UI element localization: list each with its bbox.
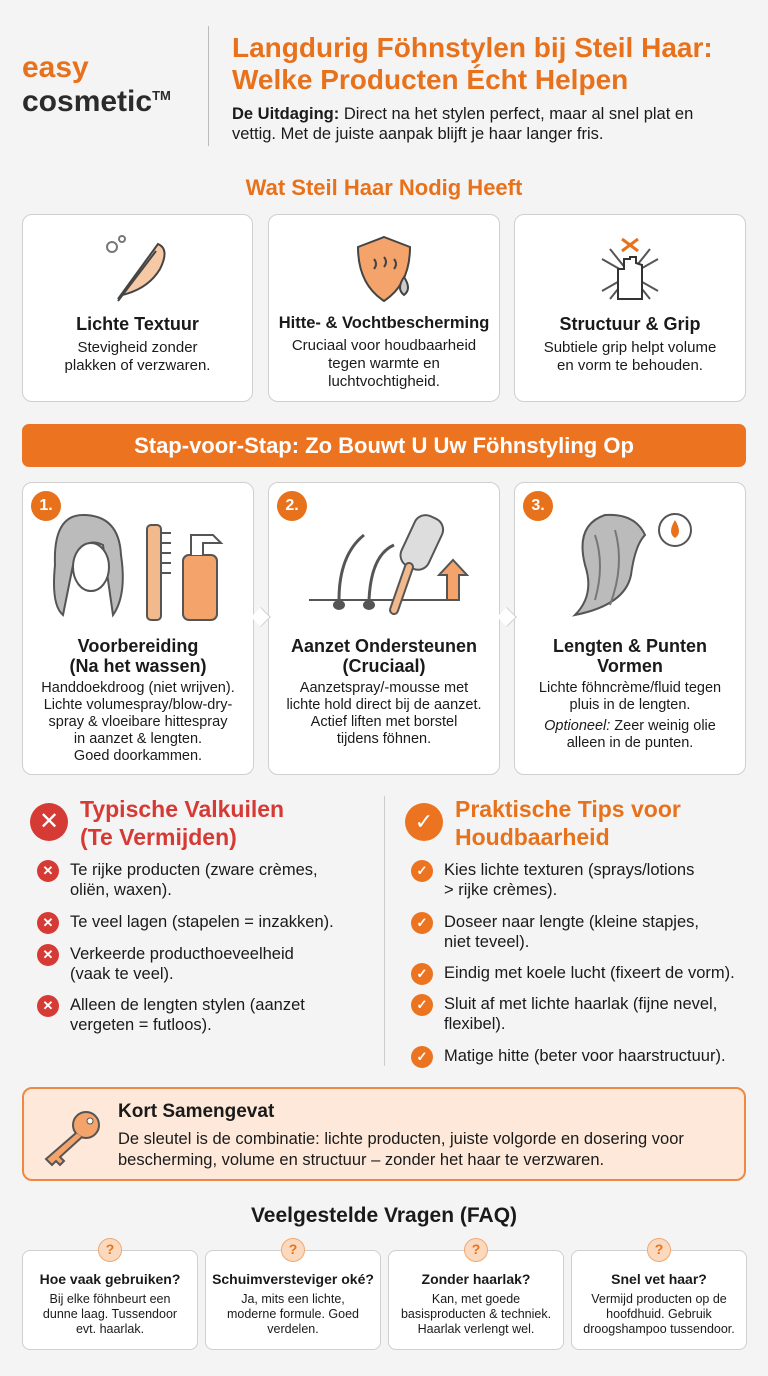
text: ✕ [43, 998, 53, 1013]
step 1: (Na het wassen) [69, 656, 207, 676]
summary box: De sleutel is de combinatie: lichte producten, juiste volgorde en dosering voor bescherming, volume en structuur – zonder het haar te verzwaren. [118, 1130, 684, 1169]
text: ✕ [43, 947, 53, 962]
faq 3: basisproducten & techniek. [401, 1307, 551, 1321]
summary box [22, 1087, 746, 1181]
tips list: Matige hitte (beter voor haarstructuur). [444, 1047, 726, 1065]
faq 4 [571, 1250, 747, 1350]
panel: bescherming: Hitte- & Vochtbescherming [279, 314, 489, 332]
step 2: Actief liften met borstel [311, 714, 457, 730]
faq 3: Haarlak verlengt wel. [418, 1322, 534, 1336]
step 3: pluis in de lengten. [570, 697, 690, 713]
title: Welke Producten Écht Helpen [232, 64, 628, 95]
title [232, 32, 713, 95]
tips heading: Praktische Tips voor [455, 796, 681, 822]
tips list: flexibel). [444, 1015, 505, 1033]
faq 4: droogshampoo tussendoor. [583, 1322, 735, 1336]
banner: stap-voor-stap: Stap-voor-Stap: Zo Bouwt U Uw Föhnstyling Op [134, 433, 634, 458]
tips list: > rijke crèmes). [444, 881, 557, 899]
tips heading [405, 796, 681, 850]
text: ✓ [417, 997, 427, 1012]
faq 1: Hoe vaak gebruiken? [40, 1271, 180, 1287]
step 3: Optioneel: Zeer weinig olie [544, 718, 716, 734]
logo: cosmeticTM [22, 85, 171, 118]
panel: structuur: Subtiele grip helpt volume [544, 339, 716, 356]
step 1: Lichte volumespray/blow-dry- [44, 697, 232, 713]
tips list: niet teveel). [444, 933, 529, 951]
icon: feather [106, 235, 166, 302]
pitfalls heading: Typische Valkuilen [80, 796, 284, 822]
step 2: Aanzet Ondersteunen [291, 636, 477, 656]
summary box: Kort Samengevat [118, 1101, 274, 1122]
faq 4: hoofdhuid. Gebruik [606, 1307, 712, 1321]
step 2: (Cruciaal) [342, 656, 426, 676]
step 3 [514, 482, 746, 775]
pitfalls heading [30, 796, 284, 850]
icon: x circle: ✕ [39, 808, 59, 835]
tips list: Sluit af met lichte haarlak (fijne nevel, [444, 995, 717, 1013]
step 3: Lengten & Punten [553, 636, 707, 656]
faq 3: Zonder haarlak? [422, 1271, 530, 1287]
faq 1 [22, 1250, 198, 1350]
panel: bescherming: Cruciaal voor houdbaarheid [292, 337, 476, 354]
step 3: Lichte föhncrème/fluid tegen [539, 680, 721, 696]
panel: lichte textuur: Lichte Textuur [76, 314, 199, 334]
text: ? [472, 1241, 480, 1257]
faq 4: Vermijd producten op de [591, 1292, 727, 1306]
pitfalls heading: (Te Vermijden) [80, 824, 237, 850]
tips list: Kies lichte texturen (sprays/lotions [444, 861, 694, 879]
tips list: Eindig met koele lucht (fixeert de vorm). [444, 964, 735, 982]
step 1: Handdoekdroog (niet wrijven). [41, 680, 235, 696]
icon: check circle [405, 803, 443, 841]
faq 1: evt. haarlak. [76, 1322, 144, 1336]
text: ✓ [417, 863, 427, 878]
FAQ heading: Veelgestelde Vragen (FAQ) [251, 1204, 517, 1227]
faq 2: Schuimversteviger oké? [212, 1271, 374, 1287]
subtitle: vettig. Met de juiste aanpak blijft je haar langer fris. [232, 125, 603, 143]
panel: structuur: Structuur & Grip [559, 314, 700, 334]
step 1: spray & vloeibare hittespray [49, 714, 227, 730]
pitfall list: Verkeerde producthoeveelheid [70, 945, 294, 963]
text: ✕ [43, 915, 53, 930]
step 3: alleen in de punten. [567, 735, 693, 751]
step 1: Voorbereiding [78, 636, 198, 656]
pitfall list: (vaak te veel). [70, 965, 174, 983]
pitfall list: Te veel lagen (stapelen = inzakken). [70, 913, 334, 931]
step 3: 3. [531, 497, 545, 514]
icon: x circle [30, 803, 68, 841]
faq 2: verdelen. [267, 1322, 319, 1336]
step 2: lichte hold direct bij de aanzet. [286, 697, 482, 713]
banner: stap-voor-stap [22, 424, 746, 467]
text: ? [655, 1241, 663, 1257]
step 3: Vormen [597, 656, 663, 676]
panel: lichte textuur: Stevigheid zonder [77, 339, 198, 356]
panel: structuur [514, 214, 746, 402]
step 2: Aanzetspray/-mousse met [300, 680, 468, 696]
pitfall list: Te rijke producten (zware crèmes, [70, 861, 318, 879]
tips heading: Houdbaarheid [455, 824, 610, 850]
icon: check circle: ✓ [415, 809, 433, 834]
icon: key [44, 1111, 100, 1166]
tips list [411, 860, 735, 1068]
faq 4: Snel vet haar? [611, 1271, 707, 1287]
logo [22, 51, 171, 118]
pitfall list [37, 860, 334, 1034]
panel: lichte textuur: plakken of verzwaren. [65, 357, 210, 374]
tips list: Doseer naar lengte (kleine stapjes, [444, 913, 699, 931]
text: ✓ [417, 1049, 427, 1064]
text: ? [289, 1241, 297, 1257]
panel: bescherming: tegen warmte en [328, 355, 440, 372]
panel: structuur: en vorm te behouden. [557, 357, 703, 374]
logo: easy [22, 51, 89, 84]
step 2: 2. [285, 497, 299, 514]
text: ✓ [417, 915, 427, 930]
icon: shield [357, 236, 411, 302]
icon: hand grip [602, 238, 658, 300]
pitfall list: oliën, waxen). [70, 881, 172, 899]
icon: round brush [309, 514, 470, 615]
subtitle [232, 105, 693, 143]
faq 3 [388, 1250, 564, 1350]
faq 2: Ja, mits een lichte, [241, 1292, 345, 1306]
step 1: in aanzet & lengten. [74, 731, 202, 747]
pitfall list: Alleen de lengten stylen (aanzet [70, 996, 305, 1014]
text: ? [106, 1241, 114, 1257]
step 2: tijdens föhnen. [337, 731, 431, 747]
text: ✕ [43, 863, 53, 878]
faq 3: Kan, met goede [432, 1292, 520, 1306]
step 2 [268, 482, 500, 775]
panel: lichte textuur [22, 214, 253, 402]
panel: bescherming [268, 214, 500, 402]
panel: bescherming: luchtvochtigheid. [328, 373, 440, 390]
pitfall list: vergeten = futloos). [70, 1016, 212, 1034]
faq 2 [205, 1250, 381, 1350]
step 1 [22, 482, 254, 775]
faq 1: Bij elke föhnbeurt een [50, 1292, 170, 1306]
step 1: Goed doorkammen. [74, 748, 202, 764]
icon: hair lengths with drop [572, 513, 692, 617]
faq 2: moderne formule. Goed [227, 1307, 359, 1321]
faq 1: dunne laag. Tussendoor [43, 1307, 177, 1321]
step 1: 1. [39, 497, 53, 514]
section heading: needs: Wat Steil Haar Nodig Heeft [246, 175, 522, 200]
text: ✓ [417, 966, 427, 981]
icon: hair, comb, spray [53, 514, 224, 621]
title: Langdurig Föhnstylen bij Steil Haar: [232, 32, 713, 63]
subtitle: De Uitdaging: Direct na het stylen perfect, maar al snel plat en [232, 105, 693, 123]
